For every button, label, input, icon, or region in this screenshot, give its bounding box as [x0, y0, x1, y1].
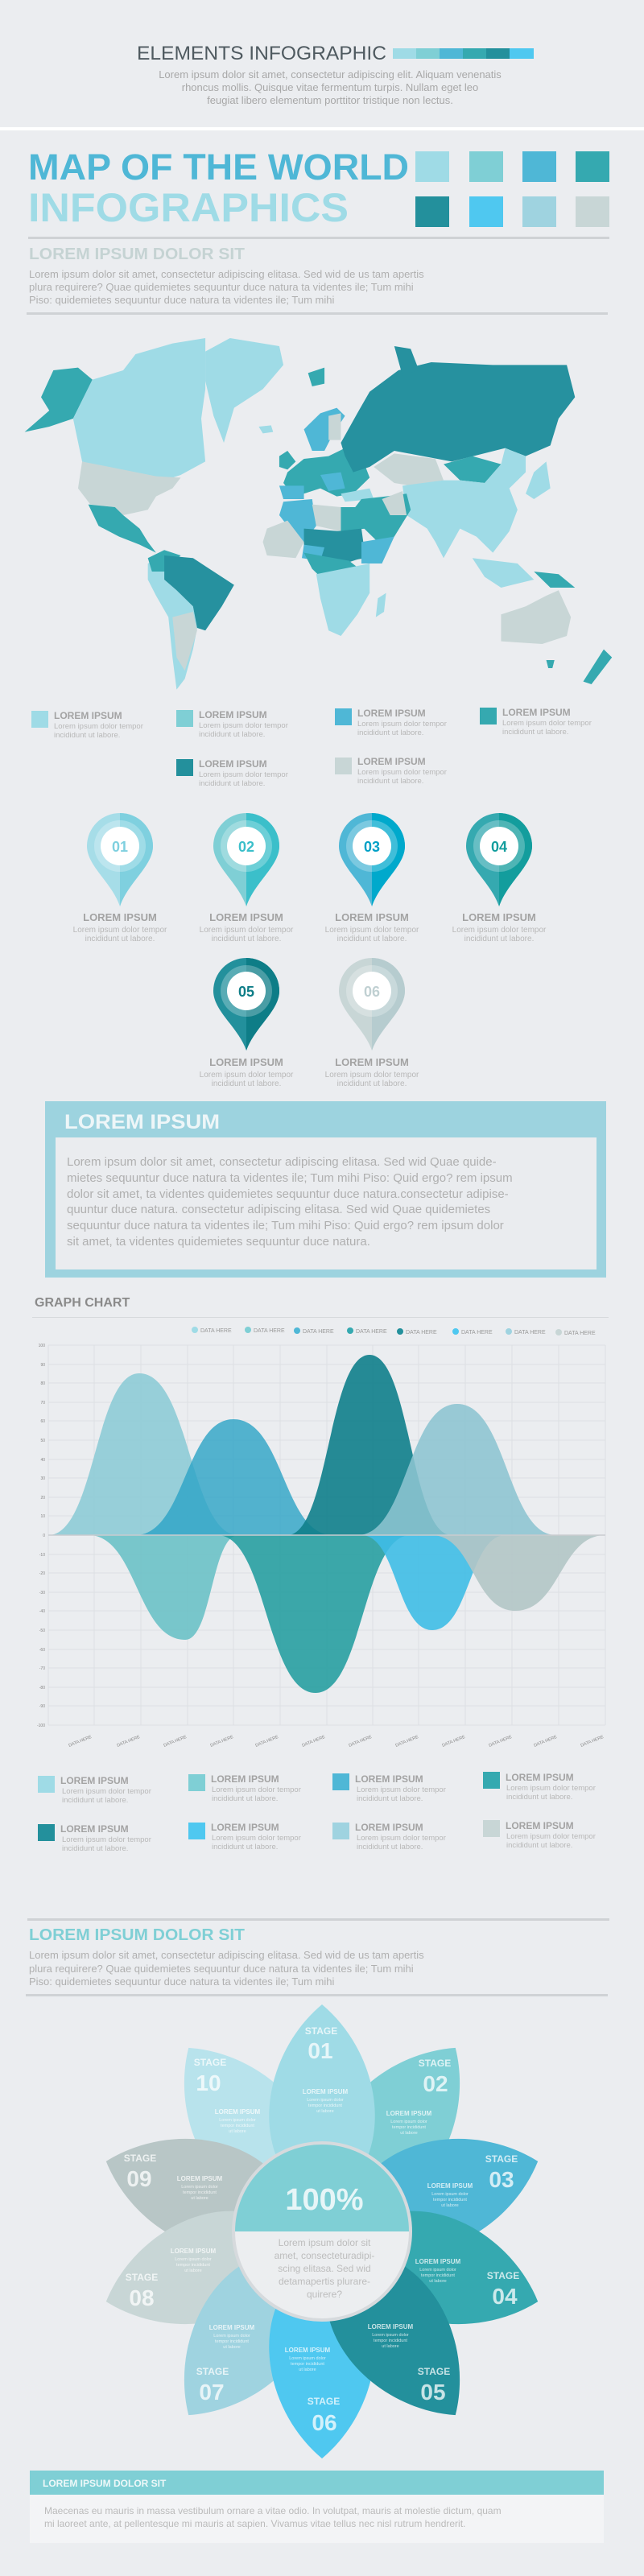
- stage labels: LOREM IPSUM: [171, 2248, 217, 2255]
- area chart: 40: [40, 1458, 45, 1463]
- stage labels: STAGE: [418, 2366, 450, 2377]
- stage labels: LOREM IPSUM: [415, 2258, 461, 2265]
- stage labels: 05: [420, 2380, 446, 2405]
- stage labels: tempor incididunt: [433, 2198, 467, 2202]
- chart legend items: LOREM IPSUM: [60, 1823, 129, 1835]
- pin labels: Lorem ipsum dolor tempor: [73, 926, 167, 935]
- chart legend items: incididunt ut labore.: [62, 1844, 128, 1853]
- chart legend items: [38, 1772, 596, 1853]
- stage labels: ut labore: [441, 2203, 459, 2208]
- stage labels: 01: [308, 2038, 333, 2063]
- stage labels: ut labore: [184, 2268, 202, 2273]
- map legend: Lorem ipsum dolor tempor: [199, 721, 288, 730]
- map legend: [31, 707, 592, 788]
- map legend: Lorem ipsum dolor tempor: [54, 722, 143, 731]
- color swatches: [415, 151, 609, 227]
- pin labels: [73, 911, 547, 1088]
- map legend: LOREM IPSUM: [357, 756, 426, 767]
- map legend: incididunt ut labore.: [54, 731, 120, 740]
- stage labels: Lorem ipsum dolor: [175, 2257, 212, 2262]
- pin labels: LOREM IPSUM: [209, 911, 283, 923]
- pin labels: LOREM IPSUM: [462, 911, 536, 923]
- stage labels: STAGE: [305, 2025, 337, 2037]
- pin labels: incididunt ut labore.: [212, 1080, 281, 1088]
- center circle 100%: amet, consecteturadipi-: [275, 2250, 374, 2261]
- header paragraph: [159, 68, 502, 106]
- center circle 100%: scing elitasa. Sed wid: [278, 2263, 371, 2274]
- map legend: Lorem ipsum dolor tempor: [357, 720, 447, 729]
- stage labels: 04: [492, 2284, 518, 2309]
- text box panel: dolor sit amet, ta videntes quidemietes sequuntur duce natura.consectetur adipise-: [67, 1187, 509, 1201]
- area chart: -30: [39, 1591, 45, 1596]
- stage labels: Lorem ipsum dolor: [307, 2098, 344, 2103]
- text box panel: quuntur duce natura. consectetur adipiscing elitasa. Sed wid Quae quidemietes: [67, 1203, 490, 1216]
- pin labels: LOREM IPSUM: [83, 911, 157, 923]
- stage labels: STAGE: [196, 2366, 229, 2377]
- chart legend: DATA HERE: [303, 1329, 334, 1335]
- stage labels: STAGE: [194, 2057, 226, 2068]
- stage labels: Lorem ipsum dolor: [181, 2185, 218, 2190]
- chart legend items: Lorem ipsum dolor tempor: [62, 1787, 151, 1796]
- area chart: DATA HERE: [489, 1735, 513, 1748]
- chart legend: DATA HERE: [461, 1330, 493, 1335]
- pin labels: Lorem ipsum dolor tempor: [200, 926, 294, 935]
- text box panel: sit amet, ta videntes quidemietes sequuntur duce natura.: [67, 1235, 370, 1249]
- chart legend items: Lorem ipsum dolor tempor: [357, 1785, 446, 1794]
- pin labels: incididunt ut labore.: [464, 935, 534, 943]
- chart legend items: incididunt ut labore.: [506, 1841, 572, 1850]
- stage labels: 08: [129, 2285, 155, 2310]
- chart legend items: Lorem ipsum dolor tempor: [212, 1834, 301, 1843]
- chart legend items: LOREM IPSUM: [355, 1822, 423, 1833]
- footer panel: LOREM IPSUM DOLOR SIT: [43, 2478, 167, 2489]
- header paragraph: feugiat libero elementum porttitor tristique non lectus.: [207, 94, 453, 106]
- stage labels: STAGE: [308, 2396, 340, 2407]
- chart legend items: incididunt ut labore.: [506, 1793, 572, 1802]
- stage labels: STAGE: [419, 2058, 451, 2069]
- area chart: DATA HERE: [210, 1735, 234, 1748]
- section 2 paragraph: Piso: quidemietes sequuntur duce natura ta videntes ile; Tum mihi: [29, 1975, 334, 1988]
- section 2 paragraph: Lorem ipsum dolor sit amet, consectetur adipiscing elitasa. Sed wid de us tam apertis: [29, 1949, 424, 1961]
- world map: [25, 338, 612, 690]
- stage labels: [124, 2025, 519, 2435]
- section 1 paragraph: Lorem ipsum dolor sit amet, consectetur adipiscing elitasa. Sed wid de us tam apertis: [29, 268, 424, 280]
- chart legend items: LOREM IPSUM: [355, 1773, 423, 1785]
- pin 06: 06: [364, 984, 380, 1000]
- stage labels: Lorem ipsum dolor: [289, 2356, 326, 2361]
- text box panel: mietes sequuntur duce natura ta videntes ile; Tum mihi Piso: Quid ergo? rem ipsum: [67, 1171, 513, 1185]
- map legend: Lorem ipsum dolor tempor: [357, 768, 447, 777]
- map legend: Lorem ipsum dolor tempor: [199, 770, 288, 779]
- title: map of the world infographics: INFOGRAPHICS: [28, 185, 349, 230]
- section 2 paragraph: [29, 1949, 424, 1988]
- chart legend items: Lorem ipsum dolor tempor: [212, 1785, 301, 1794]
- pin 02: 02: [238, 839, 254, 855]
- area chart: -10: [39, 1553, 45, 1558]
- section 2 paragraph: plura requirere? Quae quidemietes sequuntur duce natura ta videntes ile; Tum mihi: [29, 1963, 414, 1975]
- stage labels: LOREM IPSUM: [177, 2175, 223, 2182]
- title: map of the world infographics: MAP OF THE WORLD: [28, 147, 409, 188]
- chart legend: DATA HERE: [356, 1329, 387, 1335]
- area chart: -70: [39, 1666, 45, 1671]
- area chart: 70: [40, 1401, 45, 1406]
- pin 03: [339, 813, 405, 906]
- section 1 paragraph: Piso: quidemietes sequuntur duce natura ta videntes ile; Tum mihi: [29, 294, 334, 306]
- title: map of the world infographics: [28, 147, 409, 230]
- chart legend items: Lorem ipsum dolor tempor: [506, 1832, 596, 1841]
- pin labels: Lorem ipsum dolor tempor: [325, 1071, 419, 1080]
- area chart: 20: [40, 1496, 45, 1501]
- stage labels: Lorem ipsum dolor: [431, 2192, 469, 2197]
- area chart: DATA HERE: [534, 1735, 558, 1748]
- map legend: incididunt ut labore.: [357, 729, 423, 737]
- text box panel: sequuntur duce natura ta videntes ile; Tum mihi Piso: Quid ergo? rem ipsum dolor: [67, 1219, 504, 1232]
- chart legend items: LOREM IPSUM: [60, 1775, 129, 1786]
- pin labels: incididunt ut labore.: [337, 935, 407, 943]
- pin labels: incididunt ut labore.: [212, 935, 281, 943]
- area chart: 60: [40, 1419, 45, 1424]
- stage labels: ut labore: [229, 2129, 246, 2134]
- stage labels: STAGE: [124, 2153, 156, 2164]
- area chart: [37, 1344, 605, 1748]
- header: elements infographic: ELEMENTS INFOGRAPHIC: [137, 43, 386, 64]
- section 1 heading: LOREM IPSUM DOLOR SIT: [29, 246, 245, 263]
- stage labels: Lorem ipsum dolor: [213, 2334, 250, 2339]
- area chart: DATA HERE: [395, 1735, 419, 1748]
- stage labels: tempor incididunt: [392, 2125, 426, 2130]
- area chart: 30: [40, 1476, 45, 1481]
- stage labels: tempor incididunt: [176, 2263, 210, 2268]
- chart legend items: LOREM IPSUM: [506, 1820, 574, 1831]
- stage labels: ut labore: [400, 2131, 418, 2136]
- pin 05: [213, 958, 279, 1051]
- chart legend items: Lorem ipsum dolor tempor: [62, 1835, 151, 1844]
- map legend: incididunt ut labore.: [199, 730, 265, 739]
- chart legend: [192, 1327, 596, 1336]
- chart legend items: LOREM IPSUM: [211, 1822, 279, 1833]
- graph chart title: GRAPH CHART: [35, 1296, 130, 1310]
- map legend: LOREM IPSUM: [502, 707, 571, 718]
- stage labels: 02: [423, 2071, 448, 2096]
- pin 03: 03: [364, 839, 380, 855]
- chart legend: DATA HERE: [514, 1330, 546, 1335]
- text box panel: Lorem ipsum dolor sit amet, consectetur adipiscing elitasa. Sed wid Quae quide-: [67, 1155, 497, 1169]
- stage labels: 10: [196, 2070, 221, 2095]
- stage labels: 09: [126, 2166, 152, 2191]
- stage labels: ut labore: [299, 2368, 316, 2372]
- stage labels: LOREM IPSUM: [386, 2110, 432, 2117]
- stage labels: tempor incididunt: [421, 2273, 455, 2278]
- footer panel: [30, 2471, 604, 2543]
- map legend: LOREM IPSUM: [357, 708, 426, 719]
- stage labels: tempor incididunt: [291, 2362, 324, 2367]
- section 2 heading: LOREM IPSUM DOLOR SIT: [29, 1926, 245, 1944]
- stage labels: tempor incididunt: [308, 2103, 342, 2108]
- stage labels: STAGE: [485, 2153, 518, 2165]
- section 1 paragraph: plura requirere? Quae quidemietes sequuntur duce natura ta videntes ile; Tum mihi: [29, 281, 414, 293]
- flower diagram: 10 stages: [89, 2004, 555, 2458]
- pin 04: 04: [491, 839, 507, 855]
- pin labels: LOREM IPSUM: [335, 1056, 409, 1068]
- pin labels: LOREM IPSUM: [335, 911, 409, 923]
- center circle 100%: detamapertis plurare-: [279, 2276, 370, 2287]
- stage labels: ut labore: [429, 2279, 447, 2284]
- pin 02: [213, 813, 279, 906]
- area chart: 10: [40, 1514, 45, 1519]
- area chart: -100: [37, 1724, 45, 1728]
- map legend: incididunt ut labore.: [502, 728, 568, 737]
- area chart: DATA HERE: [302, 1735, 326, 1748]
- stage labels: LOREM IPSUM: [303, 2088, 349, 2095]
- stage labels: LOREM IPSUM: [215, 2108, 261, 2116]
- map legend: LOREM IPSUM: [199, 709, 267, 720]
- header paragraph: Lorem ipsum dolor sit amet, consectetur adipiscing elit. Aliquam venenatis: [159, 68, 502, 80]
- stage labels: Lorem ipsum dolor: [219, 2118, 256, 2123]
- pin labels: LOREM IPSUM: [209, 1056, 283, 1068]
- area chart: DATA HERE: [580, 1735, 605, 1748]
- chart legend items: Lorem ipsum dolor tempor: [357, 1834, 446, 1843]
- pin labels: incididunt ut labore.: [85, 935, 155, 943]
- area chart: 0: [43, 1534, 45, 1538]
- center circle 100%: [232, 2141, 412, 2322]
- pin 04: [466, 813, 532, 906]
- map legend: incididunt ut labore.: [357, 777, 423, 786]
- pin 05: 05: [238, 984, 254, 1000]
- chart legend items: incididunt ut labore.: [212, 1843, 278, 1852]
- stage labels: 07: [199, 2380, 225, 2405]
- stage labels: ut labore: [191, 2196, 208, 2201]
- stage labels: tempor incididunt: [183, 2190, 217, 2195]
- stage labels: ut labore: [316, 2109, 334, 2114]
- area chart: 50: [40, 1439, 45, 1443]
- stage labels: ut labore: [223, 2345, 241, 2350]
- center circle 100%: 100%: [285, 2183, 364, 2217]
- stage labels: ut labore: [382, 2344, 399, 2349]
- area chart: 80: [40, 1381, 45, 1386]
- stage labels: tempor incididunt: [215, 2339, 249, 2344]
- area chart: -80: [39, 1686, 45, 1690]
- chart legend items: LOREM IPSUM: [506, 1772, 574, 1783]
- section 1 paragraph: [29, 268, 424, 306]
- area chart: DATA HERE: [68, 1735, 93, 1748]
- stage labels: STAGE: [126, 2272, 158, 2283]
- chart legend items: incididunt ut labore.: [357, 1843, 423, 1852]
- map legend: incididunt ut labore.: [199, 779, 265, 788]
- color bar: [393, 48, 534, 59]
- pin labels: Lorem ipsum dolor tempor: [200, 1071, 294, 1080]
- area chart: DATA HERE: [163, 1735, 188, 1748]
- pin labels: Lorem ipsum dolor tempor: [325, 926, 419, 935]
- area chart: -50: [39, 1629, 45, 1633]
- area chart: DATA HERE: [117, 1735, 141, 1748]
- stage labels: LOREM IPSUM: [285, 2347, 331, 2354]
- stage labels: Lorem ipsum dolor: [390, 2120, 427, 2124]
- area chart: -20: [39, 1571, 45, 1576]
- stage labels: tempor incididunt: [221, 2124, 254, 2128]
- stage labels: LOREM IPSUM: [368, 2323, 414, 2330]
- stage labels: LOREM IPSUM: [209, 2324, 255, 2331]
- area chart: DATA HERE: [442, 1735, 466, 1748]
- chart legend: DATA HERE: [254, 1328, 285, 1334]
- chart legend items: LOREM IPSUM: [211, 1773, 279, 1785]
- text box panel: LOREM IPSUM: [64, 1111, 220, 1133]
- pin 01: 01: [112, 839, 128, 855]
- stage labels: 03: [489, 2167, 514, 2192]
- area chart: -40: [39, 1609, 45, 1614]
- pin 06: [339, 958, 405, 1051]
- stage labels: LOREM IPSUM: [427, 2182, 473, 2190]
- area chart: DATA HERE: [255, 1735, 279, 1748]
- pin labels: Lorem ipsum dolor tempor: [452, 926, 547, 935]
- area chart: -60: [39, 1648, 45, 1653]
- center circle 100%: Lorem ipsum dolor sit: [279, 2237, 371, 2248]
- center circle 100%: quirere?: [307, 2289, 342, 2300]
- map legend: LOREM IPSUM: [199, 758, 267, 770]
- stage labels: 06: [312, 2410, 337, 2435]
- map legend: Lorem ipsum dolor tempor: [502, 719, 592, 728]
- chart legend items: incididunt ut labore.: [212, 1794, 278, 1803]
- stage labels: tempor incididunt: [374, 2339, 407, 2343]
- pin 01: [87, 813, 153, 906]
- chart legend: DATA HERE: [200, 1328, 232, 1334]
- footer panel: mi laoreet ante, at pellentesque mi mauris at sapien. Vivamus vitae tellus nec nisl rutrum hendrerit.: [44, 2518, 465, 2529]
- header paragraph: rhoncus mollis. Quisque vitae fermentum turpis. Nullam eget leo: [182, 81, 478, 93]
- chart legend items: incididunt ut labore.: [357, 1794, 423, 1803]
- area chart: 100: [39, 1344, 45, 1348]
- stage labels: STAGE: [487, 2270, 519, 2281]
- stage labels: Lorem ipsum dolor: [372, 2333, 409, 2338]
- text box panel: [45, 1101, 606, 1278]
- chart legend: DATA HERE: [406, 1330, 437, 1335]
- stage labels: Lorem ipsum dolor: [419, 2268, 456, 2273]
- chart legend items: incididunt ut labore.: [62, 1796, 128, 1805]
- area chart: 90: [40, 1363, 45, 1368]
- pin labels: incididunt ut labore.: [337, 1080, 407, 1088]
- area chart: DATA HERE: [349, 1735, 373, 1748]
- map legend: LOREM IPSUM: [54, 710, 122, 721]
- header: elements infographic: [137, 43, 534, 106]
- chart legend: DATA HERE: [564, 1331, 596, 1336]
- chart legend items: Lorem ipsum dolor tempor: [506, 1784, 596, 1793]
- area chart: -90: [39, 1704, 45, 1709]
- footer panel: Maecenas eu mauris in massa vestibulum ornare a vitae odio. In volutpat, mauris at molestie dictum, quam: [44, 2505, 502, 2516]
